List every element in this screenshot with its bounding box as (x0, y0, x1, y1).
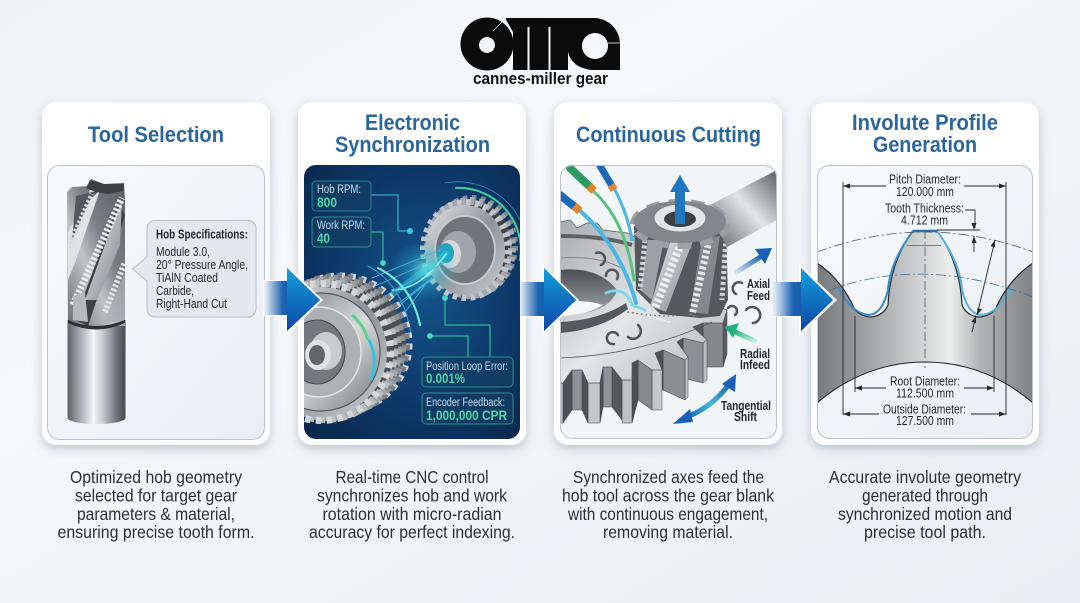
readout: position loop error: Position Loop Error: (426, 361, 508, 373)
text: involute description: Accurate involute geometry (829, 467, 1021, 487)
readout: work rpm: Work RPM: (317, 220, 365, 232)
text: tool selection description: selected for target gear (75, 486, 237, 506)
text: continuous cutting description (562, 467, 774, 542)
arrow: step 3 to 4 (772, 264, 837, 336)
heading: involute profile generation (852, 110, 998, 157)
callout: hob specifications: Module 3.0, (156, 245, 210, 259)
label: pitch diameter (890, 174, 960, 196)
label: axial feed (747, 278, 770, 300)
label: radial infeed: Infeed (740, 358, 770, 372)
text: synchronization description: rotation with micro-radian (322, 504, 502, 524)
readout: encoder feedback: Encoder Feedback: (426, 397, 505, 409)
heading: continuous cutting: Continuous Cutting (576, 122, 761, 147)
arrow: radial infeed (725, 323, 757, 342)
readout: hob rpm (312, 181, 371, 211)
label: radial infeed (740, 348, 770, 369)
chips and spray (596, 253, 760, 344)
arrow: up (670, 175, 690, 224)
panel: involute profile generation (811, 102, 1039, 445)
arrow: step 2 to 3 (518, 264, 579, 336)
readout: position loop error (422, 357, 513, 387)
illustration: involute tooth diagram (817, 165, 1033, 439)
text: tool selection description: ensuring precise tooth form. (58, 522, 254, 542)
text: continuous cutting description: with continuous engagement, (567, 504, 768, 524)
logo: cannes-miller gear (461, 18, 620, 88)
readout: work rpm (312, 217, 371, 247)
readout: work rpm: 40 (317, 230, 330, 246)
callout: hob specifications: Right-Hand Cut (156, 297, 227, 311)
callout: hob specifications: 20° Pressure Angle, (156, 258, 248, 272)
callout: hob specifications (132, 220, 256, 317)
gear blank tooth faces (560, 310, 727, 423)
label: tangential shift: Tangential (721, 399, 771, 413)
readout: hob rpm: 800 (317, 194, 337, 210)
readout: position loop error: 0.001% (426, 370, 465, 386)
label: axial feed: Feed (747, 289, 770, 303)
text: continuous cutting description: removing material. (603, 522, 733, 542)
illustration: hob cutting gear blank (560, 165, 777, 439)
spindle shaft (706, 170, 777, 247)
small hob gear (424, 199, 514, 297)
text: continuous cutting description: hob tool across the gear blank (562, 486, 774, 506)
gear blank bore (560, 269, 617, 314)
label: tooth thickness (885, 203, 964, 224)
panel: continuous cutting (554, 102, 782, 445)
hob top ring (633, 201, 727, 246)
callout: hob specifications: Carbide, (156, 284, 194, 298)
text: involute description (829, 467, 1021, 542)
coolant hoses (560, 166, 645, 310)
inner panel: tool image (48, 166, 264, 440)
signal beams (394, 242, 456, 296)
label: root diameter (890, 376, 960, 398)
centre and pitch lines (817, 230, 1033, 368)
label: radial infeed: Radial (740, 347, 770, 361)
heading: involute profile generation: Involute Profile (852, 110, 998, 135)
text: continuous cutting description: Synchronized axes feed the (573, 467, 764, 487)
label: pitch diameter: Pitch Diameter: (889, 172, 961, 186)
heading: electronic synchronization (335, 110, 490, 157)
arrow: tangential shift (673, 374, 736, 424)
dimension lines (843, 182, 1006, 415)
text: synchronization description: synchronizes hob and work (317, 486, 507, 506)
heading: involute profile generation: Generation (873, 132, 977, 157)
text: synchronization description: Real-time CNC control (336, 467, 488, 487)
label: outside diameter: Outside Diameter: (883, 402, 966, 416)
panel: electronic synchronization (292, 100, 532, 454)
label: root diameter: 112.500 mm (896, 386, 954, 400)
label: tangential shift: Shift (734, 410, 758, 424)
heading: electronic synchronization: Synchronization (335, 132, 490, 157)
callout: hob specifications: Hob Specifications: (156, 228, 248, 242)
gear tooth profile (817, 231, 1033, 403)
text: involute description: synchronized motion and (838, 504, 1012, 524)
text: synchronization description (309, 467, 515, 542)
label: outside diameter: 127.500 mm (896, 413, 954, 428)
connector lines and nodes (371, 195, 490, 357)
arrow: step 1 to 2 (263, 264, 323, 336)
text: involute description: precise tool path. (864, 522, 986, 542)
icon: hob cutter tool (67, 179, 126, 424)
label: tooth thickness: Tooth Thickness: (885, 200, 964, 216)
readout: encoder feedback: 1,000,000 CPR (426, 407, 507, 423)
gear blank top surface (560, 220, 727, 383)
text: tool selection description: parameters & material, (77, 504, 235, 524)
heading: tool selection: Tool Selection (88, 122, 224, 147)
callout: hob specifications: TiAlN Coated (156, 271, 218, 285)
label: outside diameter (884, 404, 966, 425)
label: axial feed: Axial (747, 277, 770, 291)
large work gear (304, 272, 412, 424)
arrow: axial feed (735, 248, 772, 273)
readout: hob rpm: Hob RPM: (317, 184, 361, 196)
label: tangential shift (721, 400, 770, 421)
label: pitch diameter: 120.000 mm (896, 184, 954, 199)
heading: electronic synchronization: Electronic (365, 110, 460, 135)
label: root diameter: Root Diameter: (890, 374, 960, 388)
logo wordmark: cannes-miller gear (473, 69, 608, 88)
hob body (634, 224, 728, 318)
label: tooth thickness: 4.712 mm (901, 212, 948, 228)
text: involute description: generated through (862, 486, 988, 506)
text: tool selection description: Optimized hob geometry (70, 467, 242, 487)
text: tool selection description (58, 467, 254, 542)
readout: encoder feedback (422, 393, 513, 424)
panel: tool selection (42, 102, 270, 445)
illustration: synchronized gears (304, 165, 520, 439)
text: synchronization description: accuracy for perfect indexing. (309, 522, 515, 542)
